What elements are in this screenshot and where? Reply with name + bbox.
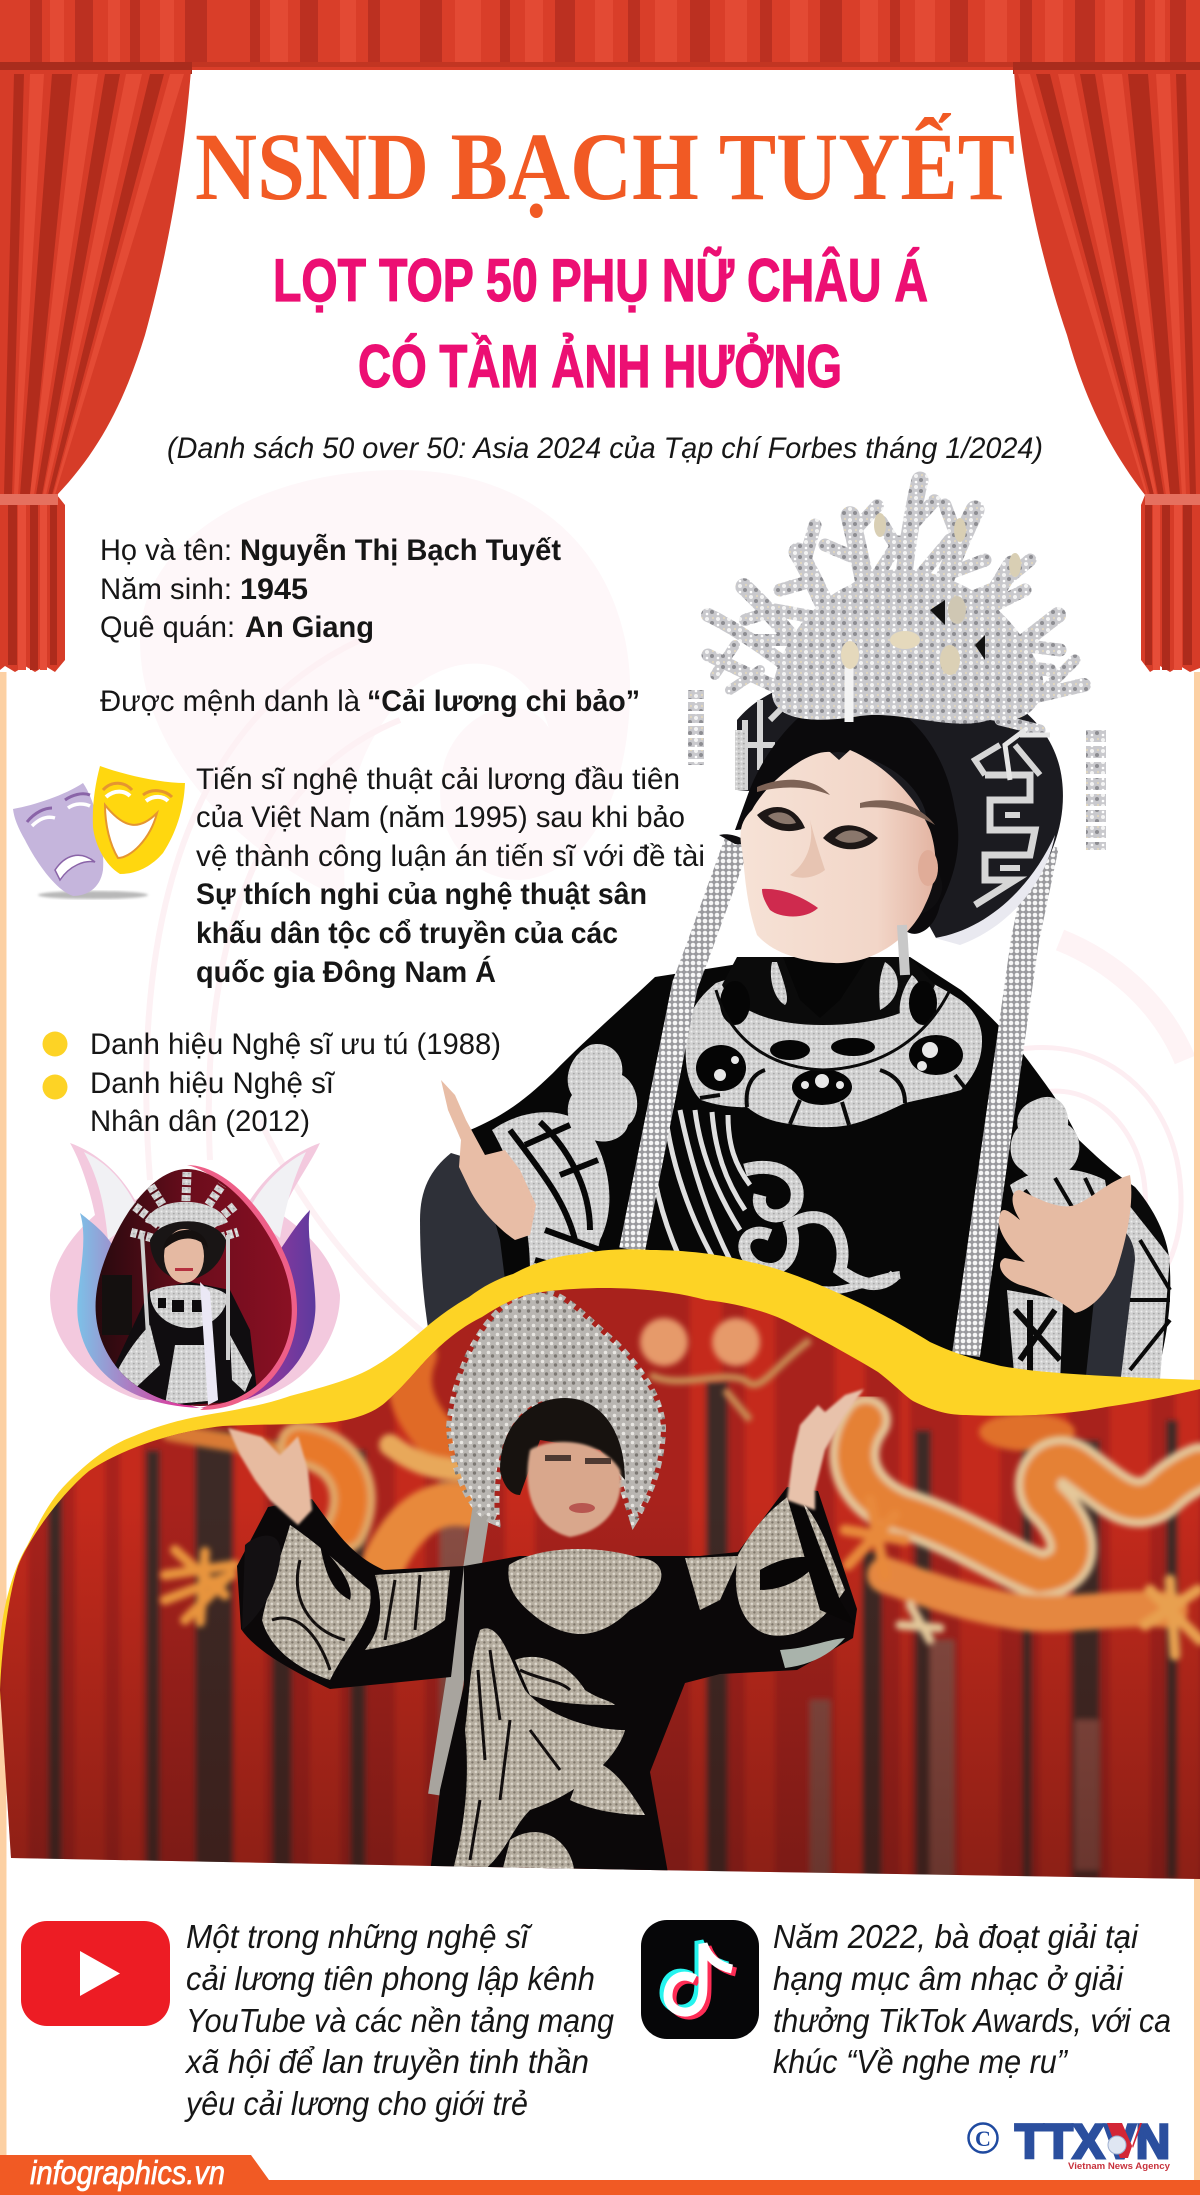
TikTok text: Năm 2022, bà đoạt giải tại [773, 1918, 1140, 1955]
TikTok text [773, 1918, 1171, 2080]
figure: left pearl strand [632, 840, 738, 1250]
photo: eyes and lips [545, 1455, 611, 1464]
portrait: strands [142, 1235, 228, 1370]
photo: lips [569, 1503, 595, 1513]
YouTube text: yêu cải lương cho giới trẻ [184, 2085, 528, 2122]
logo: copyright mark [968, 2124, 998, 2152]
figure: shoulder cloud motifs [568, 1044, 1079, 1180]
TikTok text: khúc “Về nghe mẹ ru” [773, 2043, 1069, 2080]
photo: left sleeve silver panels [242, 1525, 450, 1680]
logo: wordmark: TTXVN [1015, 2116, 1170, 2169]
curtain: left drape [0, 70, 191, 672]
portrait: sash [200, 1282, 218, 1405]
figure: right hand [999, 1175, 1131, 1313]
logo: copyright mark: C [975, 2126, 991, 2151]
background: pale pink swirl decoration [140, 470, 1185, 1420]
logo: globe [1108, 2136, 1126, 2154]
photo: left hand [228, 1428, 312, 1525]
portrait: hair [164, 1230, 202, 1248]
personal info block [100, 533, 640, 718]
stage photo: artist with raised arms [0, 1280, 1200, 1890]
info: full name [100, 533, 561, 567]
portrait: headdress [130, 1172, 238, 1240]
portrait: smile [175, 1268, 193, 1271]
stage curtain [0, 0, 1200, 672]
photo: phoenix embroidery [450, 1628, 645, 1880]
YouTube text: cải lương tiên phong lập kênh [186, 1960, 595, 1997]
doctorate paragraph: Sự thích nghi của nghệ thuật sân [196, 878, 647, 911]
figure: eye highlights [768, 812, 868, 843]
figure: left dark sleeve lining [420, 1153, 560, 1340]
info: birth year: 1945 [240, 573, 308, 606]
honour: 2012: Danh hiệu Nghệ sĩ [90, 1067, 336, 1100]
doctorate paragraph: của Việt Nam (năm 1995) sau khi bảo [196, 801, 685, 834]
yellow wave band [0, 1249, 1200, 1700]
honour: 1988: Danh hiệu Nghệ sĩ ưu tú (1988) [90, 1028, 501, 1061]
subtitle: LỌT TOP 50 PHỤ NỮ CHÂU Á [273, 247, 928, 314]
photo: right hand [787, 1389, 864, 1510]
figure: left cuff black bands [510, 1122, 600, 1275]
icon: TikTok [641, 1920, 759, 2039]
photo: right sleeve silver panel [685, 1490, 855, 1668]
subtitle [273, 247, 928, 400]
info: hometown: Quê quán: [100, 611, 235, 644]
info: full name: Nguyễn Thị Bạch Tuyết [240, 533, 561, 567]
tulip portrait medallion [50, 1143, 340, 1410]
side border: right cream strip [1194, 672, 1200, 2182]
masks: shadow [38, 891, 148, 899]
photo: face [527, 1442, 621, 1537]
subtitle: CÓ TẦM ẢNH HƯỞNG [358, 333, 842, 400]
info: full name: Họ và tên: [100, 534, 232, 567]
info: birth year: Năm sinh: [100, 573, 232, 606]
figure: phoenix feather lines [650, 1110, 750, 1280]
photo: halo crown [451, 1293, 661, 1520]
photo: top ornaments [640, 1318, 1075, 1451]
info: nickname: “Cải lương chi bảo” [367, 685, 640, 718]
source note: (Danh sách 50 over 50: Asia 2024 của Tạp chí Forbes tháng 1/2024) [167, 432, 1043, 465]
figure: eyes [757, 807, 878, 849]
doctorate paragraph [196, 763, 705, 989]
doctorate paragraph: vệ thành công luận án tiến sĩ với đề tài [196, 840, 705, 873]
photo: silver collar [508, 1549, 661, 1634]
masks: sad purple mask [13, 783, 103, 896]
figure: eyebrows [757, 780, 935, 825]
icon: theatre masks [13, 766, 185, 899]
footer [0, 2154, 1200, 2195]
doctorate paragraph: khấu dân tộc cổ truyền của các [196, 917, 618, 950]
side border: left cream strip [0, 672, 6, 2182]
portrait: sleeves and phoenix [115, 1325, 252, 1405]
figure: right cuff embroidery [1010, 1169, 1110, 1240]
figure: hat key pattern embroidery [745, 680, 1040, 905]
doctorate paragraph: quốc gia Đông Nam Á [196, 955, 496, 989]
icon: YouTube [21, 1921, 170, 2026]
honour: 2012 [42, 1067, 336, 1138]
figure: black hat disc [737, 670, 1063, 938]
tulip: portrait photo [90, 1165, 300, 1410]
figure: lips [762, 889, 818, 916]
portrait: yoke holes [158, 1298, 206, 1312]
info: hometown: An Giang [245, 611, 374, 644]
YouTube text: YouTube và các nền tảng mạng [186, 2002, 615, 2039]
figure: nose shading [790, 820, 825, 878]
masks: happy yellow mask [93, 766, 185, 874]
curtain: top valance [0, 0, 1200, 74]
YouTube text [184, 1918, 615, 2122]
portrait: hat and face [150, 1221, 226, 1280]
photo: hair [500, 1398, 625, 1495]
photo: left dragon [165, 1355, 468, 1622]
photo: figure body [428, 1487, 857, 1890]
info: nickname [100, 685, 640, 718]
TikTok text: thưởng TikTok Awards, với ca [773, 2002, 1171, 2039]
figure: costume yoke embroidery [686, 957, 982, 1127]
logo: red V accent [1107, 2123, 1142, 2158]
photo: right dragon [845, 1420, 1200, 1655]
tulip: grey inner petals [84, 1152, 306, 1240]
tulip: gradient inner cup [77, 1210, 315, 1408]
portrait: crown body [145, 1202, 228, 1230]
figure: face [740, 750, 935, 963]
figure: side curl [719, 834, 942, 915]
tulip: pink outer petals [50, 1143, 340, 1400]
info: nickname: Được mệnh danh là [100, 685, 361, 718]
figure: earring [902, 925, 905, 975]
figure: black robe [470, 957, 1135, 1400]
figure: left hand [441, 1080, 536, 1240]
photo: silver strand [437, 1505, 482, 1795]
TikTok text: hạng mục âm nhạc ở giải [773, 1960, 1125, 1997]
figure: hair [735, 690, 958, 934]
portrait: yoke [150, 1285, 228, 1328]
tulip: coral rim [187, 1165, 297, 1410]
figure: side dangles [696, 690, 1096, 850]
honour: 2012: Nhân dân (2012) [90, 1105, 310, 1138]
figure: jeweled crown [708, 480, 1084, 780]
photo: bottom darkening [0, 1554, 1200, 1879]
YouTube section [21, 1918, 615, 2122]
photo: red drape background [0, 1280, 1200, 1890]
figure: right sleeve and lining [1000, 1187, 1170, 1385]
honours list [42, 1028, 501, 1138]
figure: cloud swirl embroidery [744, 1167, 900, 1290]
info: birth year [100, 573, 308, 606]
figure: right cuff dark bands [1025, 1178, 1098, 1225]
portrait: black silver robe [115, 1282, 258, 1410]
TTXVN logo [968, 2116, 1171, 2172]
main figure: artist in black and silver costume [420, 480, 1170, 1400]
info: hometown [100, 611, 374, 644]
YouTube text: xã hội để lan truyền tinh thần [184, 2043, 589, 2080]
logo: agency line: Vietnam News Agency [1068, 2161, 1171, 2172]
footer: orange bar [0, 2155, 1200, 2195]
portrait: face [164, 1229, 204, 1283]
figure: hat white rim [935, 835, 1055, 945]
photo: left sleeve [237, 1499, 464, 1689]
figure: left cuff embroidery [492, 1112, 609, 1300]
curtain: right drape [1014, 70, 1200, 672]
figure: ear [918, 850, 938, 886]
YouTube text: Một trong những nghệ sĩ [186, 1918, 533, 1955]
doctorate paragraph: Tiến sĩ nghệ thuật cải lương đầu tiên [196, 763, 680, 796]
figure: right pearl strand [966, 845, 1045, 1355]
footer: site name: infographics.vn [30, 2154, 225, 2191]
title: NSND BẠCH TUYẾT [195, 113, 1015, 220]
TikTok section [641, 1918, 1171, 2080]
